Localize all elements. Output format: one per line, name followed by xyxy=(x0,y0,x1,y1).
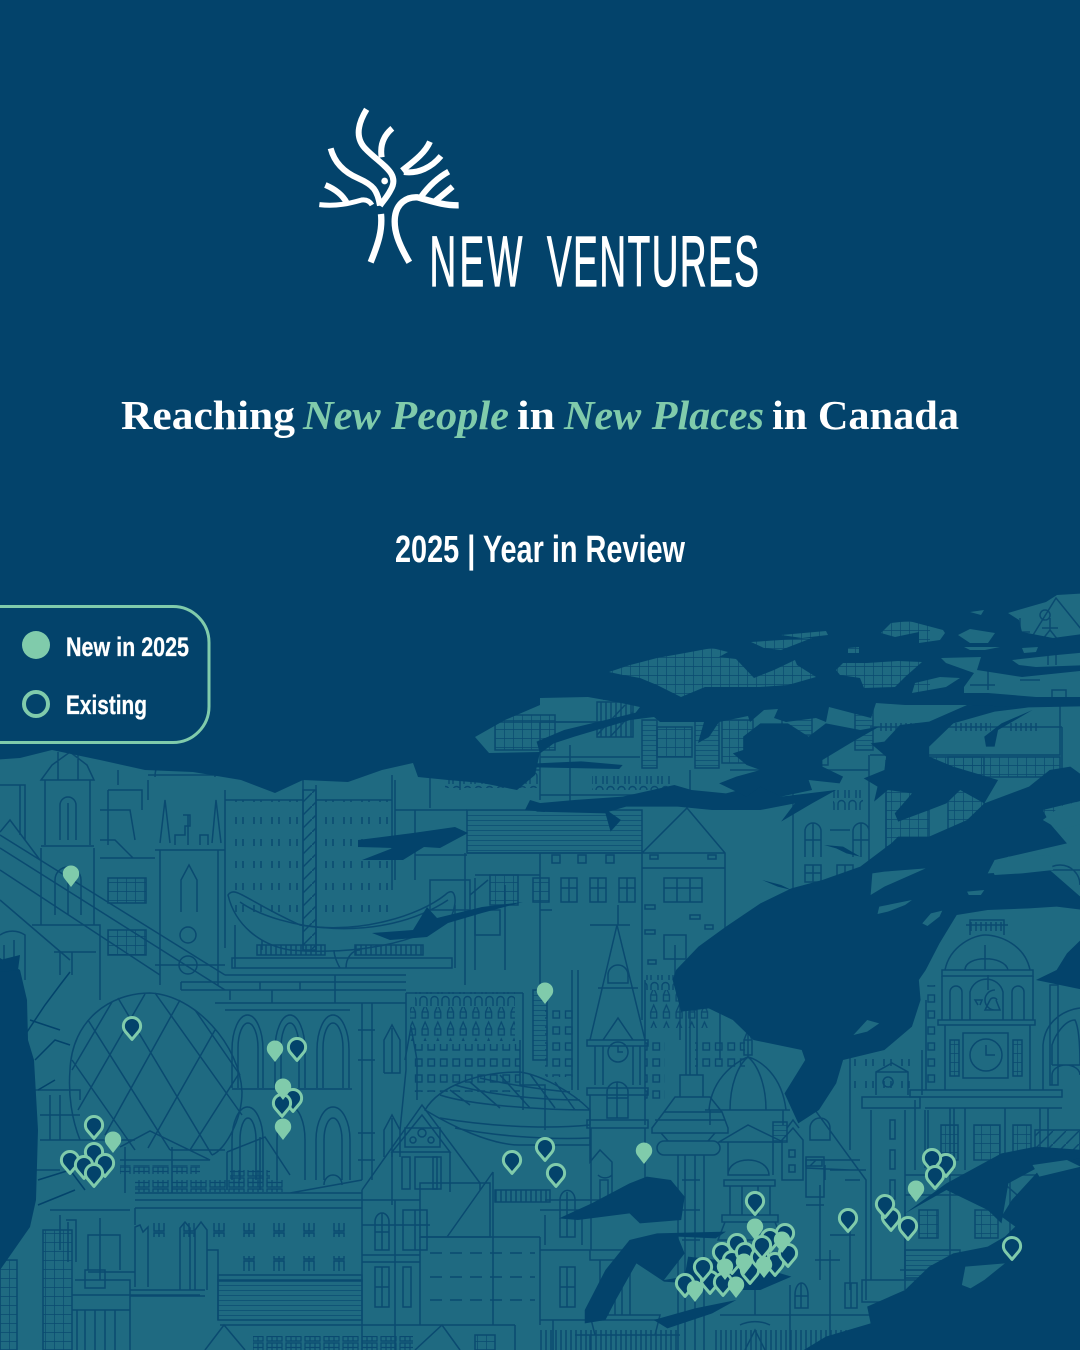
map pins: existing locations xyxy=(61,1017,1021,1296)
skyline: clock spire tower xyxy=(587,905,648,1250)
skyline: upper left towers and church xyxy=(0,747,225,1000)
atlantic lower xyxy=(798,1157,1080,1350)
title: Reaching xyxy=(121,392,296,438)
map pins: new in 2025 xyxy=(63,865,924,1302)
skyline: glass dome xyxy=(425,1072,590,1145)
logo: wordmark: VENTURES xyxy=(547,222,760,301)
lakes and channels: east xyxy=(537,705,1080,1350)
logo: tree mark xyxy=(319,109,459,262)
small lake top right xyxy=(984,710,1032,747)
skyline: chateau hotel right xyxy=(545,970,745,1105)
gulf and atlantic upper xyxy=(905,1147,1080,1223)
streak band above roof xyxy=(537,783,836,832)
northern lake xyxy=(719,723,879,797)
title: New People xyxy=(302,392,509,438)
streak over arena xyxy=(372,902,523,940)
skyline: lower centre windows xyxy=(540,1140,855,1350)
skyline: communications tower xyxy=(652,1010,728,1350)
skyline: upper right grid towers xyxy=(540,598,1080,905)
skyline: big clock tower xyxy=(910,920,1080,1170)
skyline: chateau hotel left xyxy=(400,990,547,1130)
skyline: domed parliament xyxy=(705,1030,866,1300)
skyline: west coast structures xyxy=(0,1090,135,1280)
streak near office block xyxy=(358,827,468,860)
city skyline line art xyxy=(0,598,1080,1350)
right-side coves xyxy=(1043,800,1080,830)
title: in xyxy=(517,392,555,438)
central lake xyxy=(864,705,1029,822)
lakes and channels: west xyxy=(0,800,545,1270)
skyline: saddle-roof arena xyxy=(228,892,455,968)
prairie lake xyxy=(559,1177,685,1223)
newfoundland-side land patch xyxy=(962,1263,1005,1288)
skyline: lighthouse xyxy=(830,1050,960,1302)
skyline: lower long civic building xyxy=(0,1131,515,1350)
thin inlet streaks xyxy=(824,845,860,857)
skyline: arcade block xyxy=(181,975,406,1185)
legend: new in 2025 xyxy=(22,631,189,662)
title xyxy=(121,392,959,438)
streak at coast xyxy=(525,800,545,812)
hudson bay and arctic channel xyxy=(673,767,1080,1123)
skyline: upper middle buildings xyxy=(395,715,725,1040)
title: New Places xyxy=(563,392,764,438)
skyline: twin office block and hatch column xyxy=(225,775,394,950)
subtitle: 2025 | Year in Review xyxy=(395,529,685,571)
thin streak middle left xyxy=(537,761,623,769)
skyline: gabled house xyxy=(362,1105,550,1350)
thin streak upper left xyxy=(537,712,647,753)
legend: new in 2025: New in 2025 xyxy=(66,632,189,662)
legend: existing: Existing xyxy=(66,690,147,720)
skyline: gherkin tower xyxy=(69,993,242,1155)
west coast xyxy=(0,955,38,1270)
logo: wordmark xyxy=(430,222,760,301)
sky and open water mask with island cut-outs xyxy=(0,585,1080,793)
islands within bay xyxy=(871,868,926,895)
great lakes huron and michigan xyxy=(585,1232,791,1323)
lake erie and ontario xyxy=(654,1300,736,1328)
legend: existing xyxy=(24,690,147,720)
small bay at the bottom of the coast xyxy=(0,955,20,972)
skyline: right gothic arch xyxy=(1043,1008,1080,1090)
land base of map xyxy=(0,590,1080,1350)
northeast corner water xyxy=(1036,937,1080,990)
skyline: lower right structures xyxy=(720,1175,1080,1350)
west coast branching inlets xyxy=(25,972,85,1205)
legend xyxy=(0,606,209,742)
title: in Canada xyxy=(772,392,959,438)
logo: wordmark: NEW xyxy=(430,222,526,301)
